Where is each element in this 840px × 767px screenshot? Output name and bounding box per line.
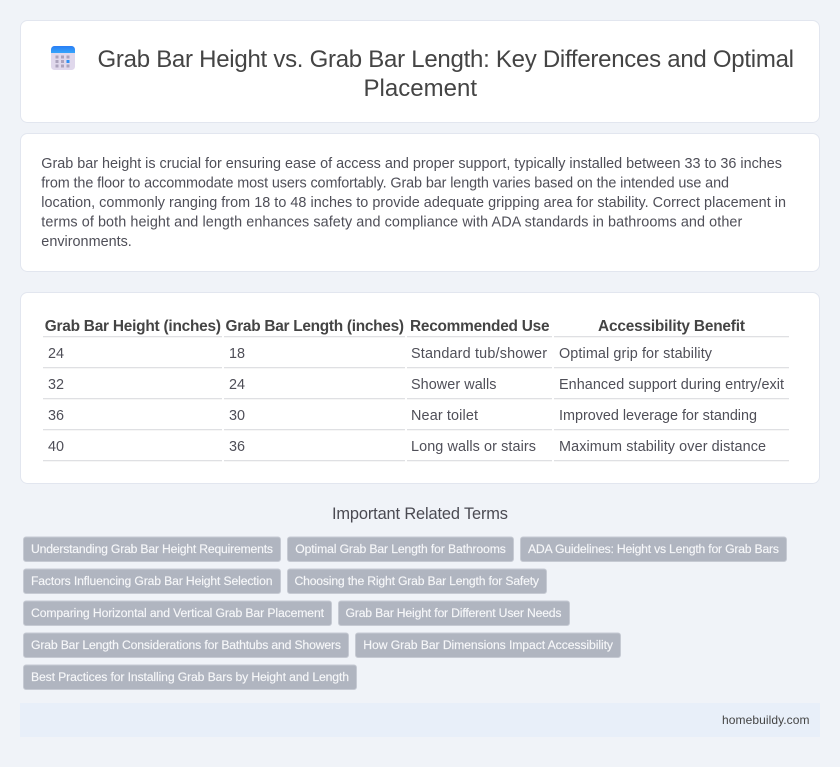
tag [24, 665, 356, 690]
intro paragraph: Grab bar height is crucial for ensuring ease of access and proper support, typically installed between 33 to 36 inches [41, 156, 782, 172]
table row 1: Optimal grip for stability [559, 346, 713, 362]
tag: Choosing the Right Grab Bar Length for Safety [294, 574, 540, 588]
tag [356, 633, 620, 658]
table row 3: Near toilet [411, 408, 478, 424]
table row 2: Enhanced support during entry/exit [559, 377, 784, 393]
icon: calendar [51, 46, 75, 70]
footer [20, 703, 820, 737]
table row 4: Maximum stability over distance [559, 439, 766, 455]
intro paragraph: environments. [41, 234, 132, 250]
table row 4 [43, 439, 789, 461]
tag: Understanding Grab Bar Height Requirements [31, 542, 273, 556]
tag [24, 569, 280, 594]
tag [24, 633, 348, 658]
tag: Optimal Grab Bar Length for Bathrooms [295, 542, 506, 556]
tag: Grab Bar Height for Different User Needs [346, 606, 562, 620]
table row 2: 32 [48, 377, 64, 393]
title [98, 46, 794, 102]
table header: Grab Bar Height (inches) [45, 318, 221, 335]
table row 3: 30 [229, 408, 245, 424]
tag: Comparing Horizontal and Vertical Grab Bar Placement [31, 606, 325, 620]
related term tags [24, 537, 786, 690]
intro paragraph: from the floor to accommodate most users comfortably. Grab bar length varies based on the intended use and [41, 175, 729, 191]
table row 1: Standard tub/shower [411, 346, 547, 362]
table header: Recommended Use [410, 318, 550, 335]
panel: title header [20, 20, 820, 122]
heading: important related terms: Important Related Terms [332, 505, 508, 523]
tag: Grab Bar Length Considerations for Bathtubs and Showers [31, 638, 341, 652]
intro paragraph [41, 156, 786, 250]
tag: How Grab Bar Dimensions Impact Accessibility [363, 638, 614, 652]
table row 2: Shower walls [411, 377, 496, 393]
title: Grab Bar Height vs. Grab Bar Length: Key Differences and Optimal [98, 46, 794, 73]
tag: ADA Guidelines: Height vs Length for Grab Bars [528, 542, 779, 556]
table row 3: 36 [48, 408, 64, 424]
intro paragraph: terms of both height and length enhances safety and compliance with ADA standards in bathrooms and other [41, 214, 743, 230]
tag: Best Practices for Installing Grab Bars by Height and Length [31, 670, 349, 684]
table header: Grab Bar Length (inches) [226, 318, 404, 335]
tag: Factors Influencing Grab Bar Height Selection [31, 574, 272, 588]
title: Placement [364, 75, 477, 102]
tag [288, 537, 514, 562]
table row 4: 40 [48, 439, 64, 455]
panel: introduction [20, 134, 820, 272]
table row 4: 36 [229, 439, 245, 455]
panel: comparison table [20, 292, 820, 484]
tag [338, 601, 570, 626]
table row 4: Long walls or stairs [411, 439, 536, 455]
table row 3: Improved leverage for standing [559, 408, 757, 424]
tag [24, 601, 332, 626]
table row 2 [43, 377, 789, 399]
table row 1: 18 [229, 346, 245, 362]
table row 1: 24 [48, 346, 64, 362]
table row 2: 24 [229, 377, 245, 393]
footer: homebuildy.com [722, 713, 810, 727]
tag [288, 569, 546, 594]
table header: Accessibility Benefit [598, 318, 745, 335]
table row 1 [43, 346, 789, 368]
tag [520, 537, 786, 562]
tag [24, 537, 280, 562]
table header [43, 318, 789, 337]
intro paragraph: location, commonly ranging from 18 to 48 inches to provide adequate gripping area for stability. Correct placement in [41, 195, 786, 211]
table row 3 [43, 408, 789, 430]
